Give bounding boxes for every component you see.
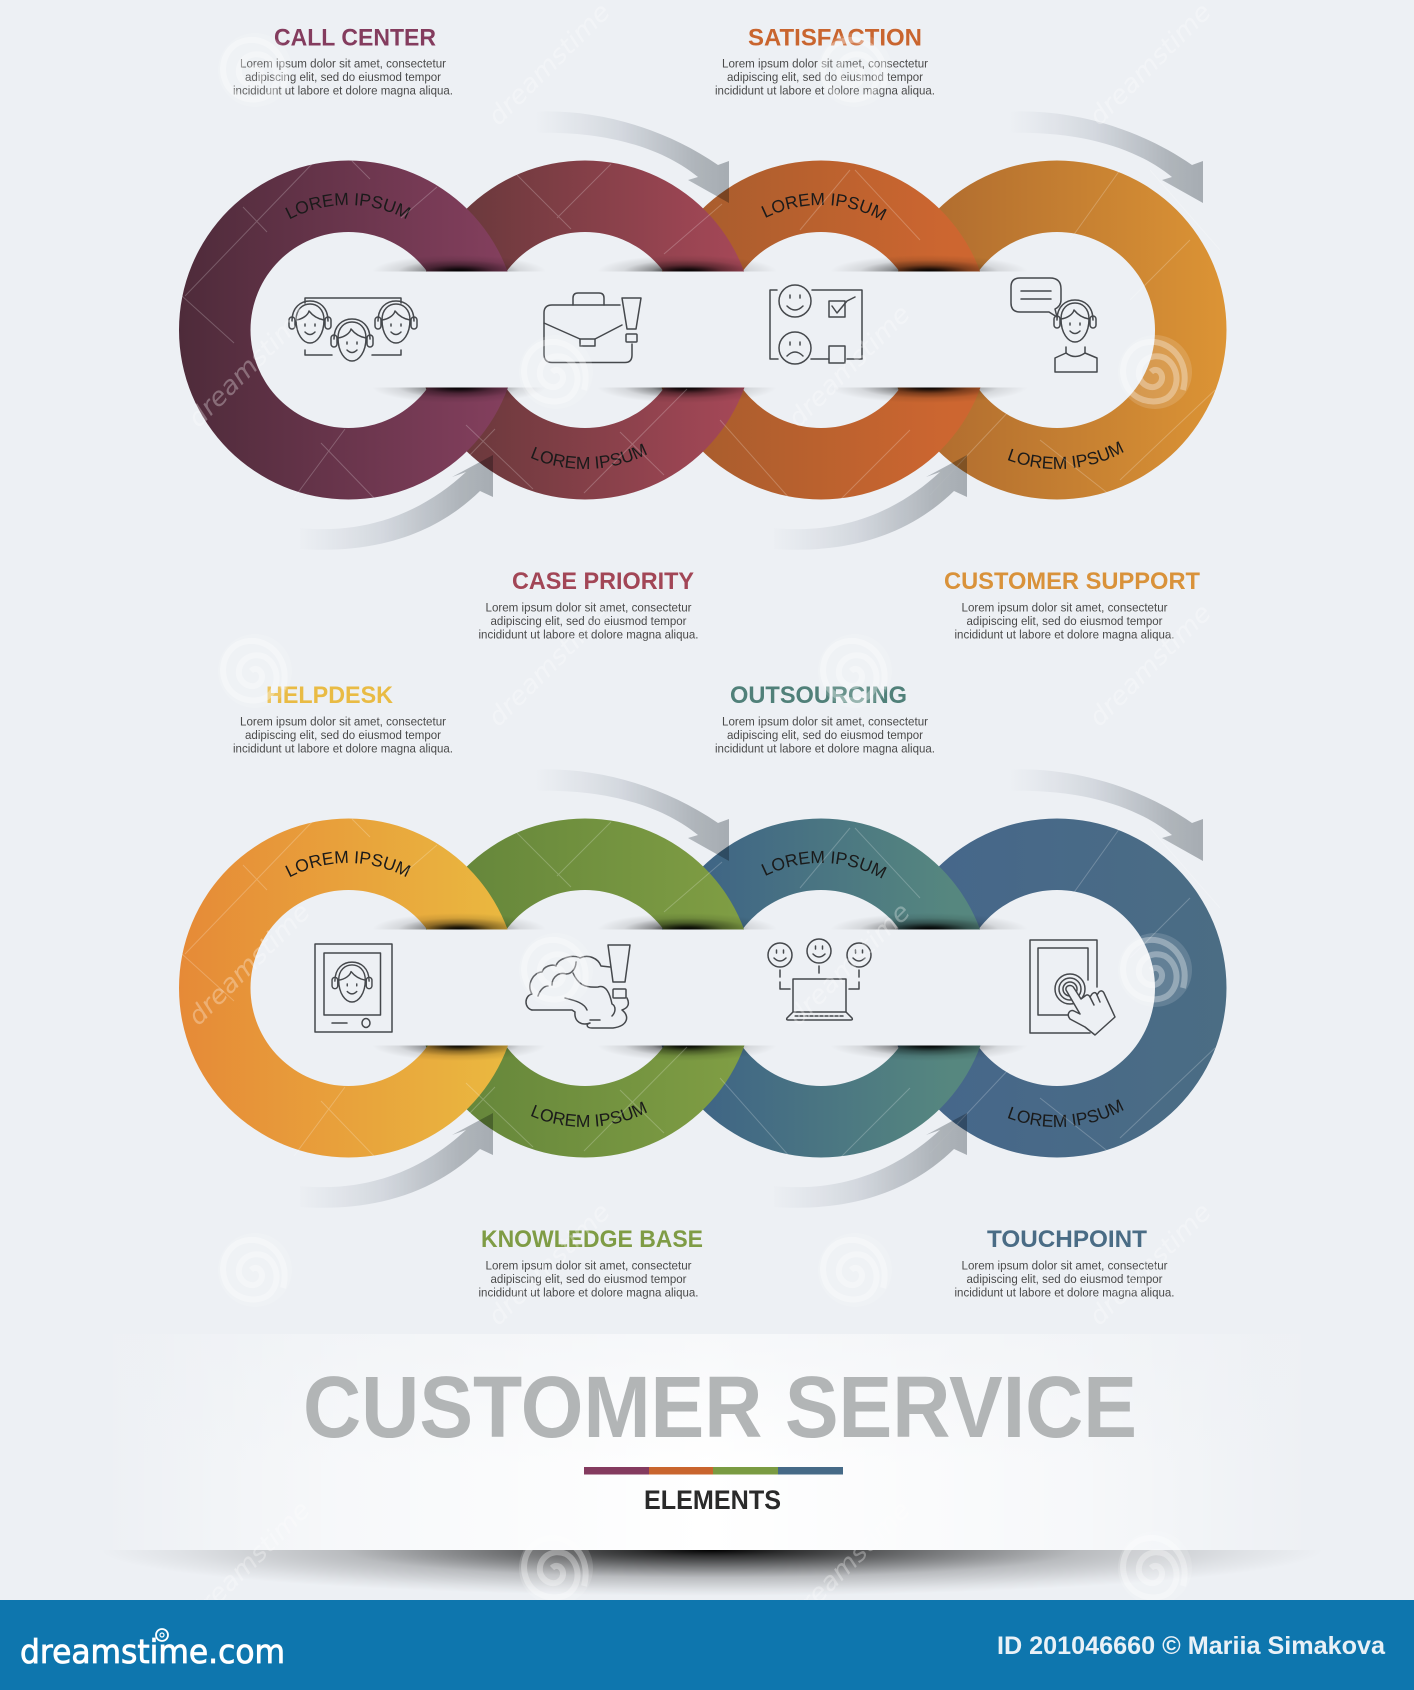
icon: tablet touch [1030,940,1115,1035]
color bar [584,1467,843,1474]
text block: satisfaction [715,24,935,98]
panel: bottom ring chain [179,818,1226,1158]
text block: call center [233,24,453,98]
body: Lorem ipsum dolor sit amet, consectetur [722,714,928,728]
body: Lorem ipsum dolor sit amet, consectetur [240,56,446,70]
text block: touchpoint [954,1226,1174,1300]
ring: customer support [888,160,1226,500]
heading: OUTSOURCING [730,682,907,709]
curved label: ring 2: LOREM IPSUM [531,444,647,469]
body [954,1258,1174,1300]
body [478,600,698,642]
icon: call center team [289,298,417,361]
body: incididunt ut labore et dolore magna aliqua. [954,628,1174,642]
body: incididunt ut labore et dolore magna aliqua. [715,742,935,756]
body [233,56,453,98]
ring: touchpoint [888,818,1226,1158]
heading: SATISFACTION [748,24,922,52]
arrow: bottom row lower 2 [774,1113,967,1208]
heading: TOUCHPOINT [987,1226,1147,1253]
watermark text: dreamstime [1083,598,1217,732]
panel: title card [100,1334,1324,1596]
heading: CUSTOMER SUPPORT [944,568,1200,595]
arrow: bottom row 2 [1004,769,1203,861]
body: Lorem ipsum dolor sit amet, consectetur [486,1258,692,1272]
body: adipiscing elit, sed do eiusmod tempor [490,614,686,628]
watermark text: dreamstime [782,299,916,433]
arrow: top row 1 [530,111,729,203]
watermark text: dreamstime [1083,1197,1217,1331]
icon: satisfaction survey [770,285,862,364]
band shadows [372,913,1028,1061]
body: Lorem ipsum dolor sit amet, consectetur [962,600,1168,614]
body: adipiscing elit, sed do eiusmod tempor [727,70,923,84]
watermark text: dreamstime [482,1197,616,1331]
card shadow [100,1550,1324,1596]
watermark text: dreamstime [482,598,616,732]
footer bar [0,1600,1414,1690]
curved label: ring 2: LOREM IPSUM [531,1102,647,1127]
panel: top ring chain [179,160,1226,500]
body: Lorem ipsum dolor sit amet, consectetur [962,1258,1168,1272]
watermark text: dreamstime [482,0,616,131]
watermark text: dreamstime [182,1495,316,1629]
text block: outsourcing [715,682,935,756]
subtitle: ELEMENTS [644,1485,781,1515]
arrow: bottom row 1 [530,769,729,861]
footer credit: ID 201046660 © Mariia Simakova [997,1632,1386,1660]
icon: tablet with agent [315,944,392,1032]
ring: call center [179,160,518,500]
ring: knowledge base [415,818,754,1158]
body [715,714,935,756]
curved label: ring 1: LOREM IPSUM [285,850,411,877]
icon: support agent with speech bubble [1011,278,1097,372]
watermark text [182,0,1217,1629]
ring: helpdesk [179,818,518,1158]
curved label: ring 4: LOREM IPSUM [1008,1099,1124,1128]
watermark text: dreamstime [1083,0,1217,131]
body [233,714,453,756]
watermark text: dreamstime [182,897,316,1031]
body: adipiscing elit, sed do eiusmod tempor [490,1272,686,1286]
watermark text: dreamstime [182,299,316,433]
curved label: ring 3: LOREM IPSUM [761,192,887,220]
center band [360,272,1026,388]
body: Lorem ipsum dolor sit amet, consectetur [240,714,446,728]
arrow: bottom row lower 1 [300,1113,493,1208]
watermark text: dreamstime [782,1495,916,1629]
card surface [100,1334,1314,1550]
text block: helpdesk [233,682,453,756]
body: incididunt ut labore et dolore magna aliqua. [478,628,698,642]
body [715,56,935,98]
title: CUSTOMER SERVICE [303,1359,1137,1456]
body: Lorem ipsum dolor sit amet, consectetur [722,56,928,70]
body [478,1258,698,1300]
curved label: ring 3: LOREM IPSUM [761,850,887,878]
watermark spirals [218,33,1192,1605]
band shadows [372,255,1028,403]
body: adipiscing elit, sed do eiusmod tempor [245,728,441,742]
body: incididunt ut labore et dolore magna aliqua. [233,84,453,98]
body: adipiscing elit, sed do eiusmod tempor [727,728,923,742]
watermark text: dreamstime [782,897,916,1031]
heading: HELPDESK [266,682,393,709]
body: Lorem ipsum dolor sit amet, consectetur [486,600,692,614]
heading: CALL CENTER [274,24,436,52]
heading: KNOWLEDGE BASE [481,1226,703,1253]
arrow: top row lower 1 [300,455,493,550]
curved label: ring 4: LOREM IPSUM [1008,441,1124,470]
text block: customer support [944,568,1200,642]
ring: case priority [415,160,754,500]
body [954,600,1174,642]
body: adipiscing elit, sed do eiusmod tempor [966,1272,1162,1286]
footer logo: dreamstime.com [20,1632,285,1671]
ring: outsourcing [652,818,990,1158]
arrow: top row 2 [1004,111,1203,203]
body: adipiscing elit, sed do eiusmod tempor [966,614,1162,628]
heading: CASE PRIORITY [512,568,694,595]
body: incididunt ut labore et dolore magna aliqua. [233,742,453,756]
body: incididunt ut labore et dolore magna aliqua. [478,1286,698,1300]
text block: knowledge base [478,1226,703,1300]
text block: case priority [478,568,698,642]
body: incididunt ut labore et dolore magna aliqua. [954,1286,1174,1300]
curved label: ring 1: LOREM IPSUM [285,192,411,219]
icon: briefcase with exclamation [544,293,641,362]
arrow: top row lower 2 [774,455,967,550]
icon: brain with exclamation [526,945,630,1028]
icon: laptop with smiley feedback [768,939,871,1020]
body: incididunt ut labore et dolore magna aliqua. [715,84,935,98]
ring: satisfaction [652,160,990,500]
body: adipiscing elit, sed do eiusmod tempor [245,70,441,84]
center band [360,930,1026,1046]
